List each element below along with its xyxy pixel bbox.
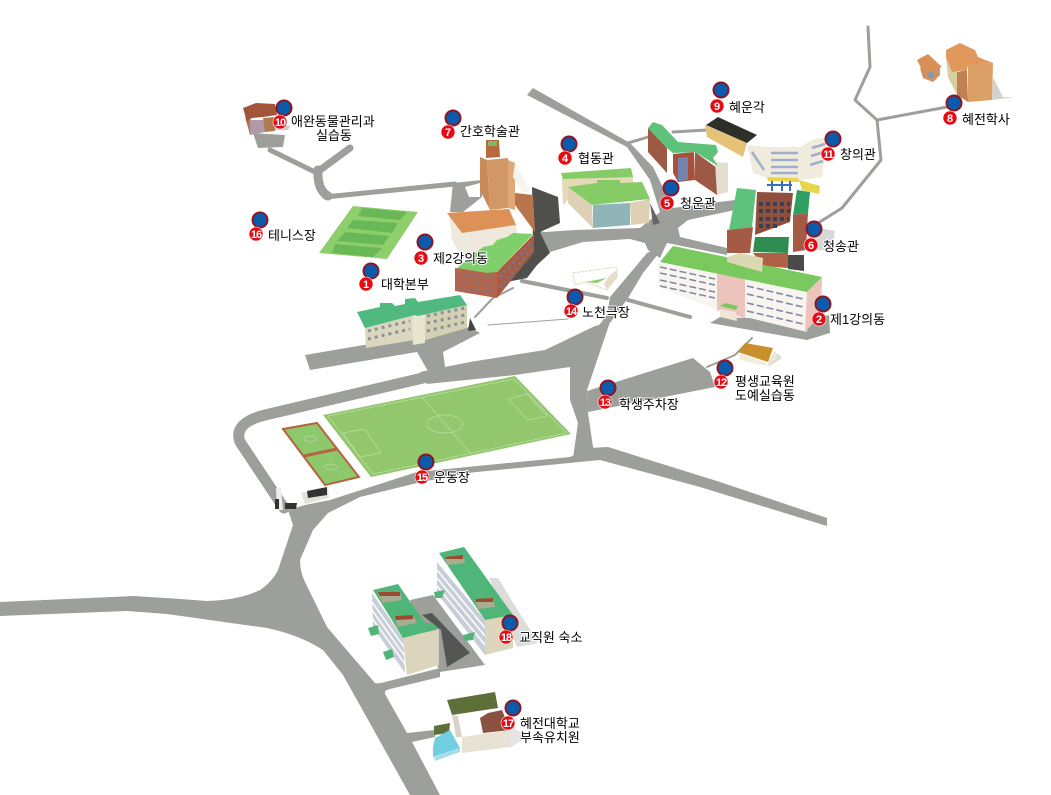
- marker 10 and label: [273, 100, 375, 143]
- basketball courts: [283, 423, 359, 485]
- marker 17 and label: 17: [503, 718, 514, 730]
- marker 15 and label: 15: [417, 472, 428, 484]
- marker 1 and label: 1: [363, 279, 369, 291]
- marker 11 and label: [821, 132, 876, 162]
- marker 10 and label: 실습동: [316, 128, 352, 143]
- marker 2 and label: 2: [816, 314, 822, 326]
- marker 16 and label: [249, 212, 316, 243]
- marker 12 and label: 평생교육원: [735, 374, 795, 389]
- building 10: animal care lab: [243, 103, 290, 135]
- building 17: kindergarten: [433, 692, 510, 761]
- building 1: university HQ: [357, 295, 467, 348]
- marker 11 and label: 창의관: [840, 147, 876, 162]
- marker 7 and label: 간호학술관: [460, 124, 520, 139]
- marker 17 and label: 부속유치원: [520, 730, 580, 745]
- building 9: hyeungak: [705, 117, 757, 157]
- marker 7 and label: [441, 110, 520, 139]
- marker 12 and label: [714, 360, 795, 403]
- marker 9 and label: [710, 82, 765, 115]
- marker 17 and label: 혜전대학교: [520, 716, 580, 731]
- marker 14 and label: [564, 290, 630, 320]
- marker 4 and label: 4: [562, 153, 569, 165]
- marker 5 and label: 5: [664, 198, 670, 210]
- building 3: second lecture hall, nursing hall: [447, 140, 535, 298]
- marker 10 and label: 10: [275, 117, 286, 129]
- marker 3 and label: 3: [418, 253, 424, 265]
- tennis courts: [319, 206, 418, 259]
- marker 7 and label: 7: [445, 127, 451, 139]
- marker 12 and label: 도예실습동: [735, 388, 795, 403]
- marker 4 and label: 협동관: [578, 151, 614, 166]
- marker 18 and label: [499, 616, 582, 645]
- building 6: cheongsong hall: [727, 188, 810, 271]
- marker 16 and label: 테니스장: [268, 228, 316, 243]
- marker 14 and label: 노천극장: [582, 305, 630, 320]
- marker 12 and label: 12: [716, 377, 727, 389]
- marker 14 and label: 14: [566, 306, 578, 318]
- marker 8 and label: [943, 96, 1010, 127]
- marker 1 and label: [359, 264, 429, 292]
- marker 6 and label: 6: [808, 240, 814, 252]
- building 5: cheongun hall: [648, 122, 728, 195]
- marker 1 and label: 대학본부: [381, 277, 429, 292]
- marker 3 and label: 제2강의동: [433, 251, 488, 266]
- marker 17 and label: [501, 700, 580, 745]
- marker 13 and label: [598, 380, 679, 412]
- marker 3 and label: [414, 234, 488, 266]
- marker 9 and label: 혜운각: [729, 100, 765, 115]
- marker 2 and label: [812, 296, 885, 327]
- building 4: cooperation hall: [561, 168, 660, 228]
- marker 5 and label: [660, 180, 716, 211]
- building 2: first lecture hall: [658, 246, 822, 332]
- marker 11 and label: 11: [823, 149, 834, 161]
- marker 18 and label: 교직원 숙소: [519, 630, 582, 645]
- marker 4 and label: [558, 136, 614, 166]
- marker 8 and label: 혜전학사: [962, 112, 1010, 127]
- marker 2 and label: 제1강의동: [830, 312, 885, 327]
- marker 6 and label: [804, 222, 859, 254]
- building 12: lifelong education: [738, 343, 782, 367]
- marker 10 and label: 애완동물관리과: [291, 114, 375, 129]
- marker 13 and label: 학생주차장: [619, 397, 679, 412]
- sports field: [323, 376, 571, 477]
- marker 6 and label: 청송관: [823, 239, 859, 254]
- building 11: creativity hall: [747, 137, 827, 194]
- gate: [275, 487, 329, 510]
- marker 5 and label: 청운관: [680, 196, 716, 211]
- marker 15 and label: [415, 454, 470, 485]
- marker 13 and label: 13: [600, 397, 611, 409]
- building 14: open-air theater: [573, 267, 617, 290]
- building 18: staff housing: [368, 547, 513, 675]
- marker 15 and label: 운동장: [434, 470, 470, 485]
- marker 18 and label: 18: [501, 632, 512, 644]
- marker 9 and label: 9: [714, 101, 720, 113]
- building 8: hyejeon dormitory: [917, 43, 1015, 102]
- marker 16 and label: 16: [251, 229, 262, 241]
- marker 8 and label: 8: [947, 113, 953, 125]
